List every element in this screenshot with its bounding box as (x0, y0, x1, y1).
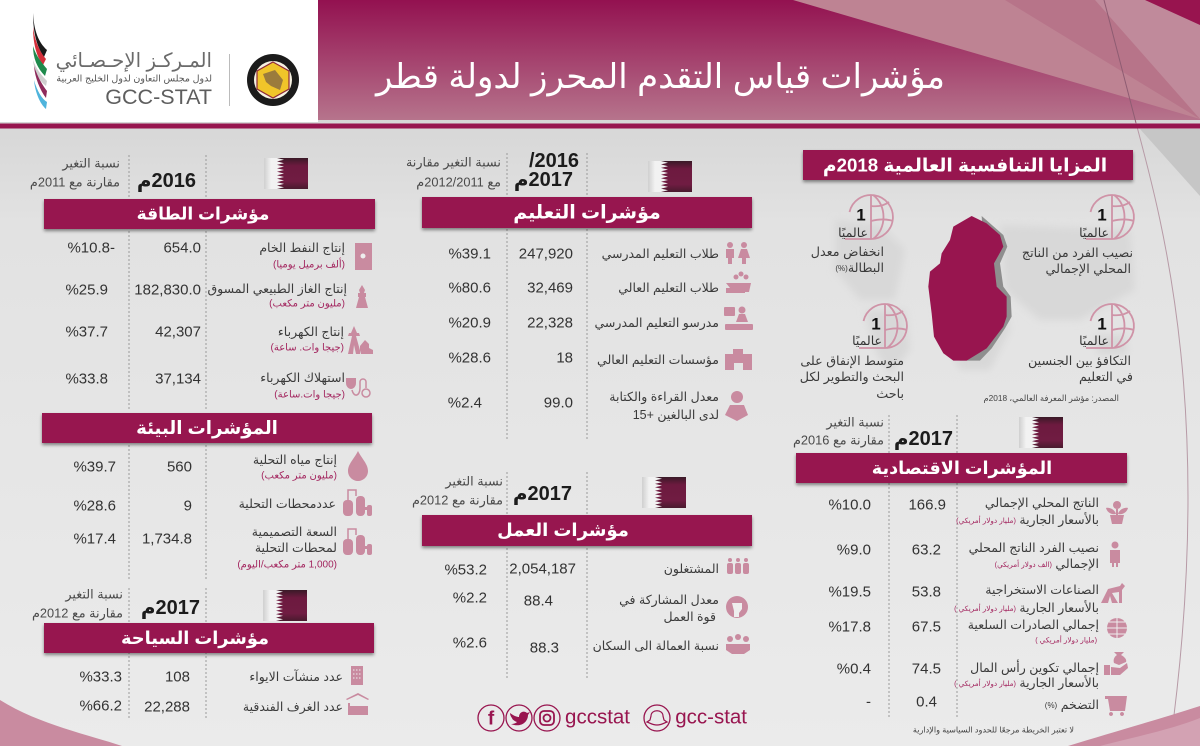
indicator: low unemployment rank: البطالة(%) (835, 261, 884, 275)
year: /2016 (529, 150, 579, 172)
row: hotel rooms: 22,288 (144, 698, 190, 716)
row: capital formation: إجمالي تكوين رأس المال (970, 659, 1099, 676)
heading (796, 453, 1127, 483)
heading: مؤشرات السياحة (121, 628, 269, 649)
icon: group of people (726, 634, 750, 654)
indicator: gender parity rank: في التعليم (1079, 370, 1133, 385)
change label: مع 2012/2011م (416, 174, 501, 190)
change label (793, 414, 884, 448)
icon: reader (725, 391, 748, 421)
row: extractive industries (828, 583, 1125, 616)
change label (412, 474, 503, 508)
row: school teachers: %20.9 (448, 314, 491, 332)
title banner (0, 0, 1200, 128)
icon: desalination plant (343, 490, 372, 516)
row: employed (444, 558, 749, 578)
year: 2017م (514, 169, 573, 191)
icon: person (1110, 542, 1120, 567)
map of Qatar (928, 216, 1012, 361)
change label (406, 154, 501, 190)
panel: global competitive advantages (800, 150, 1135, 403)
panel: environment indicators (42, 413, 372, 580)
row: employed: المشتغلون (664, 562, 719, 577)
row: school students: %39.1 (448, 246, 491, 262)
change label (32, 586, 123, 622)
row: crude oil production: %10.8- (67, 240, 115, 256)
handle gccstat: gccstat (565, 706, 630, 728)
row: GDP: %10.0 (828, 496, 871, 514)
indicator: gender parity rank (1028, 304, 1134, 385)
flag (264, 158, 308, 189)
row: inflation: - (866, 694, 871, 710)
row: crude oil production: (ألف برميل يوميا) (273, 258, 345, 270)
icon: snapchat (644, 705, 670, 731)
source note: المصدر: مؤشر المعرفة العالمي، 2018م (984, 393, 1119, 403)
row: merchandise exports: إجمالي الصادرات السلعية (968, 618, 1099, 633)
row: extractive industries: 53.8 (912, 584, 941, 600)
change label: مقارنة مع 2011م (30, 174, 120, 190)
row: adult literacy: %2.4 (448, 394, 482, 412)
heading: المؤشرات الاقتصادية (872, 458, 1052, 479)
icon: raised fist (726, 596, 748, 618)
indicator: R&D spending rank: البحث والتطوير لكل (800, 370, 904, 385)
panel: education indicators (406, 150, 753, 440)
social media handles (478, 705, 747, 731)
panel: economic indicators (793, 414, 1128, 736)
row: hotel rooms: %66.2 (79, 698, 122, 714)
row: design capacity: السعة التصميمية (252, 525, 337, 539)
icon: students at desks (726, 272, 751, 293)
row: desalinated water (73, 451, 368, 482)
change label: نسبة التغير مقارنة (406, 154, 501, 170)
row: electricity consumption (65, 370, 370, 400)
icon: hotel building (351, 666, 363, 685)
change label: مقارنة مع 2016م (793, 432, 884, 448)
row: employed: 2,054,187 (509, 560, 576, 578)
year: 2017م (513, 483, 572, 505)
indicator: gender parity rank: عالميًا (1079, 334, 1109, 348)
row: higher education institutions: %28.6 (448, 350, 491, 366)
row: participation rate: %2.2 (453, 590, 487, 606)
row: participation rate: قوة العمل (664, 610, 716, 625)
row: marketed natural gas: إنتاج الغاز الطبيعي المسوق (207, 282, 347, 297)
panel: energy indicators (30, 155, 375, 410)
heading: مؤشرات الطاقة (137, 204, 269, 224)
row: school teachers: 22,328 (527, 314, 573, 332)
row: GDP per capita: نصيب الفرد الناتج المحلي (969, 541, 1099, 556)
change label: نسبة التغير (64, 586, 123, 602)
row: hotel rooms: عدد الغرف الفندقية (243, 700, 343, 715)
row: GDP per capita: %9.0 (837, 542, 871, 558)
row: marketed natural gas: %25.9 (65, 282, 108, 298)
row: employment to population (453, 634, 750, 656)
row: desalination plants: %28.6 (73, 498, 116, 514)
flag (642, 477, 686, 508)
row: employed: %53.2 (444, 562, 487, 578)
row: desalinated water: 560 (167, 458, 192, 476)
year: 2016م (137, 170, 196, 192)
row: GDP per capita (837, 541, 1120, 571)
change label: نسبة التغير (825, 414, 884, 430)
row: employment to population: نسبة العمالة الى السكان (593, 639, 719, 653)
icon: shopping cart (1105, 696, 1127, 716)
logo latin name: GCC-STAT (105, 85, 212, 109)
row: marketed natural gas (65, 282, 368, 310)
row: electricity production (65, 324, 373, 354)
row: GDP per capita: الإجمالي (الف دولار أمريكي) (995, 557, 1099, 571)
change label: مقارنة مع 2012م (32, 606, 123, 622)
flag (648, 161, 692, 192)
logo Arabic name: المـركـز الإحـصـائي (56, 50, 212, 72)
indicator: R&D spending rank: 1 (871, 314, 881, 334)
indicator: low unemployment rank (811, 195, 893, 275)
panel: tourism indicators (32, 586, 374, 720)
row: higher education students: %80.6 (448, 280, 491, 296)
icon: oil barrel (355, 243, 372, 270)
row: marketed natural gas: (مليون متر مكعب) (269, 298, 345, 310)
row: higher education students: 32,469 (527, 280, 573, 296)
row: adult literacy: معدل القراءة والكتابة (609, 390, 719, 405)
logo subtitle: لدول مجلس التعاون لدول الخليج العربية (56, 74, 212, 84)
change label: نسبة التغير (444, 474, 503, 490)
row: desalinated water: إنتاج مياه التحلية (253, 453, 337, 467)
icon: gas tower (356, 285, 368, 308)
icon: facebook: f (488, 708, 495, 730)
row: higher education students: طلاب التعليم العالي (618, 281, 719, 296)
row: higher education institutions (448, 349, 752, 370)
row: design capacity: لمحطات التحلية (255, 541, 337, 555)
icon: money plant (1106, 501, 1128, 524)
row: school students: 247,920 (519, 246, 573, 262)
icon: coloured ribbon logo (33, 13, 47, 109)
row: desalinated water: (مليون متر مكعب) (261, 470, 337, 482)
heading (44, 199, 375, 229)
row: employment to population: %2.6 (453, 634, 487, 652)
row: accommodation establishments: %33.3 (79, 668, 122, 686)
row: electricity consumption: (جيجا وات.ساعة) (274, 390, 345, 400)
row: design capacity (73, 525, 372, 570)
row: desalinated water: %39.7 (73, 458, 116, 476)
row: marketed natural gas: 182,830.0 (134, 282, 201, 298)
icon: twitter (506, 705, 532, 731)
icon: desalination plant (343, 529, 372, 555)
indicator: low unemployment rank: 1 (856, 206, 866, 224)
indicator: GDP per capita rank: عالميًا (1079, 226, 1109, 240)
icon: hand with money bag (1104, 652, 1128, 675)
row: desalination plants: 9 (184, 498, 192, 514)
indicator: gender parity rank: 1 (1097, 314, 1107, 334)
icon: plug and meter (346, 378, 370, 397)
heading: مؤشرات العمل (497, 520, 629, 541)
row: capital formation: 74.5 (912, 660, 941, 678)
row: accommodation establishments: 108 (165, 668, 190, 686)
row: inflation: 0.4 (916, 694, 937, 710)
handle gcc-stat: gcc-stat (675, 706, 747, 728)
icon: globe (1107, 618, 1127, 638)
row: GDP per capita: 63.2 (912, 542, 941, 558)
icon: pump jack (1101, 583, 1125, 603)
row: crude oil production (67, 240, 372, 270)
icon: children (726, 242, 750, 264)
row: adult literacy (448, 390, 748, 423)
icon: water drop (348, 451, 368, 481)
row: adult literacy: لدى البالغين +15 (633, 408, 719, 423)
year (514, 150, 579, 191)
row: design capacity: (1,000 متر مكعب/اليوم) (237, 560, 337, 570)
change label (30, 156, 120, 190)
icon: bed under roof (346, 693, 369, 715)
heading: مؤشرات التعليم (513, 202, 661, 224)
row: inflation: التضخم (%) (1045, 698, 1099, 713)
indicator: R&D spending rank: متوسط الإنفاق على (800, 354, 904, 369)
heading (803, 150, 1133, 180)
indicator: low unemployment rank: عالميًا (838, 226, 868, 240)
row: desalination plants (73, 490, 372, 516)
heading (422, 515, 752, 546)
icon: electricity pylon (348, 326, 373, 354)
row: design capacity: 1,734.8 (142, 530, 192, 548)
row: accommodation establishments: عدد منشآت الايواء (249, 669, 343, 685)
indicator: GDP per capita rank: 1 (1097, 206, 1107, 224)
row: capital formation: بالأسعار الجارية (مليار دولار أمريكي ) (954, 675, 1099, 691)
row: electricity consumption: 37,134 (155, 370, 201, 388)
icon: institution building (725, 349, 752, 370)
row: electricity consumption: %33.8 (65, 370, 108, 388)
row: crude oil production: إنتاج النفط الخام (259, 241, 345, 255)
row: electricity consumption: استهلاك الكهرباء (260, 371, 345, 386)
row: higher education institutions: مؤسسات التعليم العالي (597, 353, 719, 368)
icon: crowd (727, 558, 749, 574)
row: merchandise exports: %17.8 (828, 618, 871, 636)
heading: المؤشرات البيئة (136, 418, 278, 439)
indicator: R&D spending rank: باحث (876, 387, 904, 401)
row: higher education students (448, 272, 751, 296)
row: merchandise exports: (مليار دولار أمريكي ) (1035, 634, 1097, 644)
row: higher education institutions: 18 (556, 350, 573, 366)
heading (44, 623, 374, 653)
row: electricity production: (جيجا وات. ساعة) (271, 342, 344, 354)
row: design capacity: %17.4 (73, 530, 116, 548)
indicator: low unemployment rank: انخفاض معدل (811, 245, 884, 260)
row: employment to population: 88.3 (530, 640, 559, 656)
indicator: GDP per capita rank (1022, 195, 1134, 276)
icon: instagram (534, 705, 560, 731)
icon: teacher and class (724, 306, 753, 330)
row: adult literacy: 99.0 (544, 394, 573, 412)
row: school students: طلاب التعليم المدرسي (602, 247, 719, 262)
indicator: GDP per capita rank: نصيب الفرد من الناتج (1022, 246, 1133, 261)
flag (1019, 417, 1063, 448)
row: crude oil production: 654.0 (163, 240, 201, 256)
row: electricity production: %37.7 (65, 324, 108, 340)
heading: المزايا التنافسية العالمية 2018م (823, 154, 1107, 176)
row: participation rate (453, 590, 748, 625)
row: school students (448, 242, 750, 264)
row: GDP: الناتج المحلي الإجمالي (985, 496, 1099, 510)
year: 2017م (894, 428, 953, 450)
flag (263, 590, 307, 621)
change label: مقارنة مع 2012م (412, 492, 503, 508)
row: GDP: 166.9 (908, 496, 946, 514)
row: hotel rooms (79, 693, 369, 716)
indicator: R&D spending rank: عالميًا (852, 334, 882, 348)
panel: labour indicators (412, 472, 752, 680)
year: 2017م (141, 597, 200, 619)
row: merchandise exports: 67.5 (912, 618, 941, 636)
row: desalination plants: عددمحطات التحلية (239, 497, 336, 511)
icon: facebook (478, 705, 504, 731)
row: capital formation: %0.4 (837, 660, 871, 678)
map disclaimer: لا تعتبر الخريطة مرجعًا للحدود السياسية والإدارية (913, 726, 1074, 736)
row: electricity production: 42,307 (155, 324, 201, 340)
row: participation rate: معدل المشاركة في (619, 593, 719, 608)
row: GDP: بالأسعار الجارية (مليار دولار أمريكي) (956, 512, 1099, 528)
row: extractive industries: بالأسعار الجارية (مليار دولار أمريكي ) (954, 600, 1099, 616)
world map backdrop (835, 220, 1135, 375)
row: extractive industries: الصناعات الاستخراجية (985, 583, 1099, 598)
logo block: GCC-STAT (33, 13, 299, 109)
indicator: gender parity rank: التكافؤ بين الجنسين (1028, 354, 1131, 369)
row: school teachers: مدرسو التعليم المدرسي (595, 316, 719, 331)
heading (42, 413, 372, 443)
title text: مؤشرات قياس التقدم المحرز لدولة قطر (374, 58, 945, 97)
row: GDP (828, 496, 1128, 528)
indicator: GDP per capita rank: المحلي الإجمالي (1046, 262, 1131, 276)
row: inflation (866, 694, 1127, 716)
row: accommodation establishments (79, 666, 363, 686)
row: merchandise exports (828, 618, 1127, 644)
row: school teachers (448, 306, 753, 332)
row: extractive industries: %19.5 (828, 584, 871, 600)
icon: GCC emblem (247, 54, 299, 106)
indicator: R&D spending rank (800, 304, 907, 401)
row: participation rate: 88.4 (524, 592, 553, 610)
heading (422, 197, 752, 228)
row: capital formation (837, 652, 1128, 691)
change label: نسبة التغير (61, 156, 120, 172)
row: electricity production: إنتاج الكهرباء (278, 325, 344, 340)
